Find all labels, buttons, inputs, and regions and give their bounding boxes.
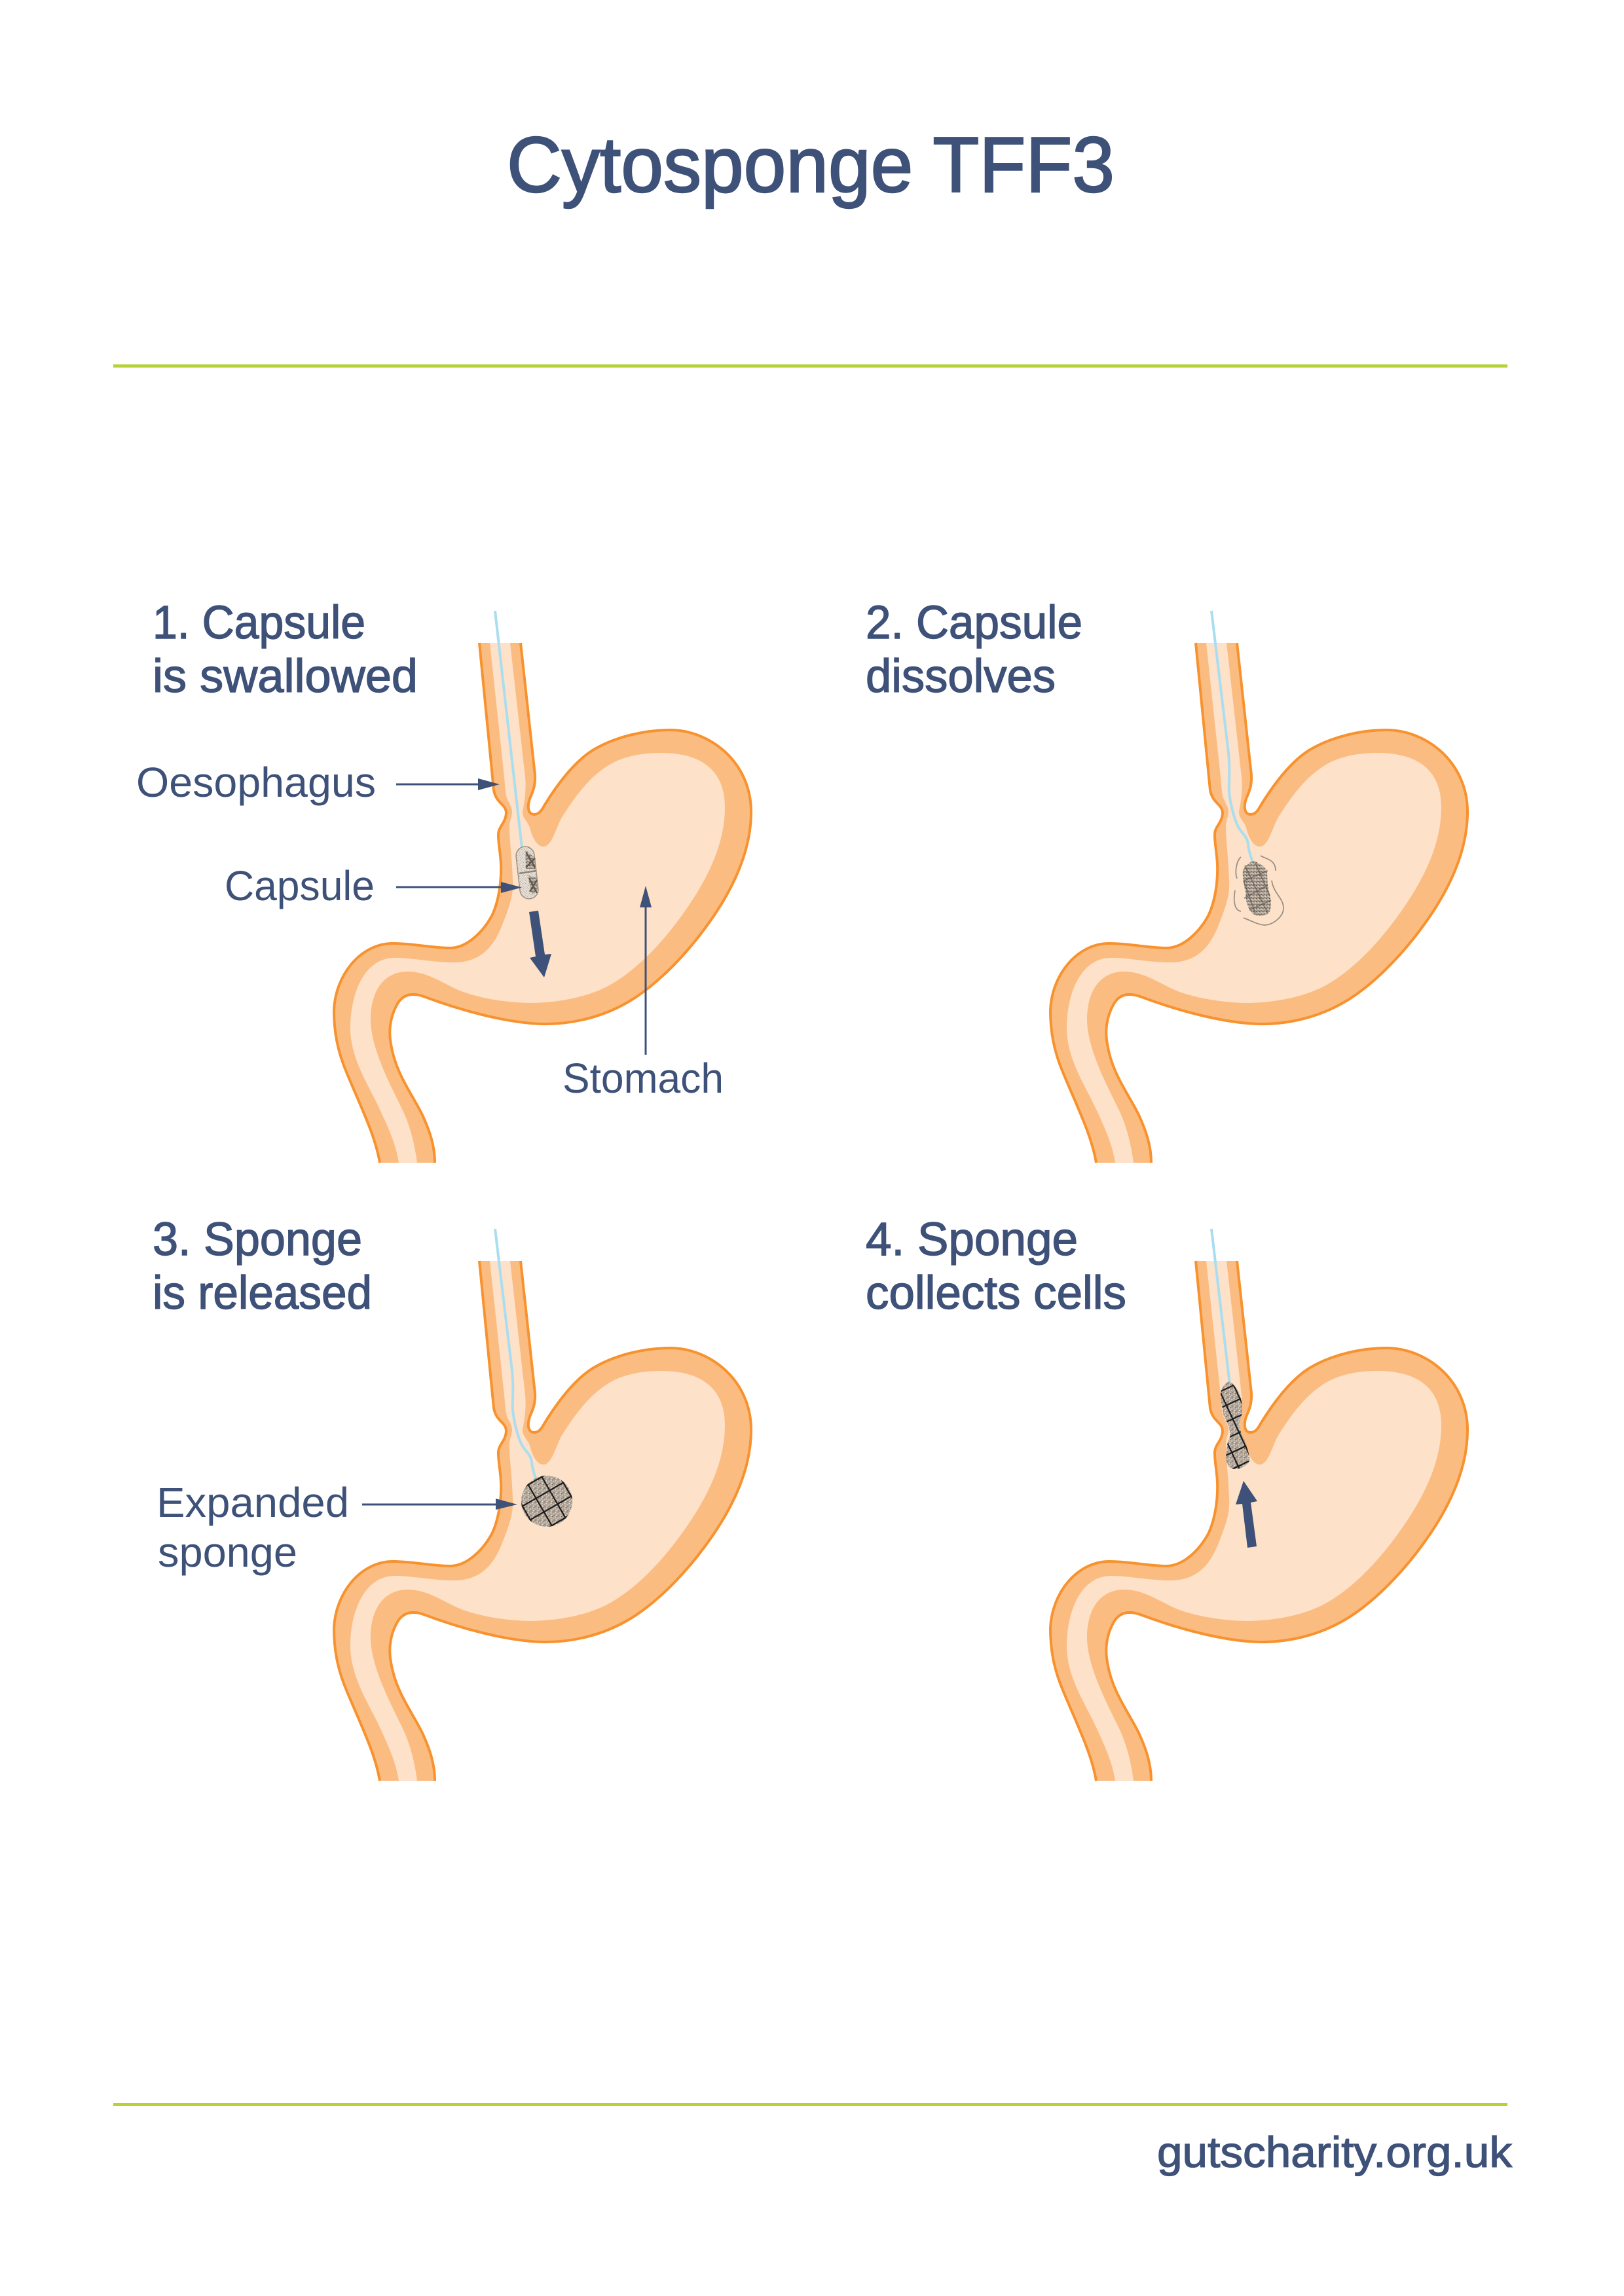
heading 4: collects cells — [866, 1267, 1126, 1319]
panel 4: sponge collects cells — [866, 1214, 1467, 1781]
string 2 — [1211, 611, 1253, 862]
capsule shell fragments — [1234, 856, 1283, 925]
arrow: stomach — [640, 886, 652, 1055]
label: capsule: Capsule — [225, 862, 375, 909]
swallowed string 1 — [495, 611, 522, 848]
panel 1: capsule is swallowed — [136, 597, 751, 1163]
panel 3: sponge is released — [153, 1214, 751, 1781]
label: expanded sponge: sponge — [158, 1529, 297, 1576]
heading 1: is swallowed — [153, 651, 418, 702]
heading 4 — [866, 1214, 1126, 1319]
label: stomach: Stomach — [563, 1055, 724, 1102]
dissolving sponge — [1243, 861, 1271, 916]
heading 1: 1. Capsule — [153, 597, 365, 649]
heading 2: dissolves — [866, 651, 1056, 702]
heading 2 — [866, 597, 1082, 702]
top divider — [113, 364, 1507, 368]
arrow: expanded sponge — [362, 1499, 517, 1510]
heading 4: 4. Sponge — [866, 1214, 1078, 1266]
label: expanded sponge: Expanded — [157, 1479, 349, 1526]
heading 3: 3. Sponge — [153, 1214, 362, 1266]
website: gutscharity.org.uk — [1157, 2128, 1513, 2176]
string 4 — [1211, 1229, 1230, 1385]
expanded sponge — [521, 1476, 572, 1527]
bottom divider — [113, 2103, 1507, 2106]
downward arrow — [529, 911, 551, 977]
capsule — [515, 846, 539, 900]
stomach illustration 2 — [1050, 643, 1467, 1163]
label: expanded sponge — [157, 1479, 349, 1576]
stomach illustration 4 — [1050, 1261, 1467, 1781]
heading 3 — [153, 1214, 372, 1319]
heading 3: is released — [153, 1267, 372, 1319]
heading 2: 2. Capsule — [866, 597, 1082, 649]
compressed sponge — [1221, 1381, 1249, 1469]
string 3 — [495, 1229, 536, 1480]
upward arrow — [1236, 1481, 1257, 1548]
label: oesophagus: Oesophagus — [136, 759, 376, 806]
arrow: capsule — [396, 882, 522, 893]
stomach illustration 1 — [334, 643, 751, 1163]
panel 2: capsule dissolves — [866, 597, 1467, 1163]
heading 1 — [153, 597, 418, 702]
stomach illustration 3 — [334, 1261, 751, 1781]
title: Cytosponge TFF3 — [507, 121, 1115, 209]
arrow: oesophagus — [396, 778, 500, 790]
